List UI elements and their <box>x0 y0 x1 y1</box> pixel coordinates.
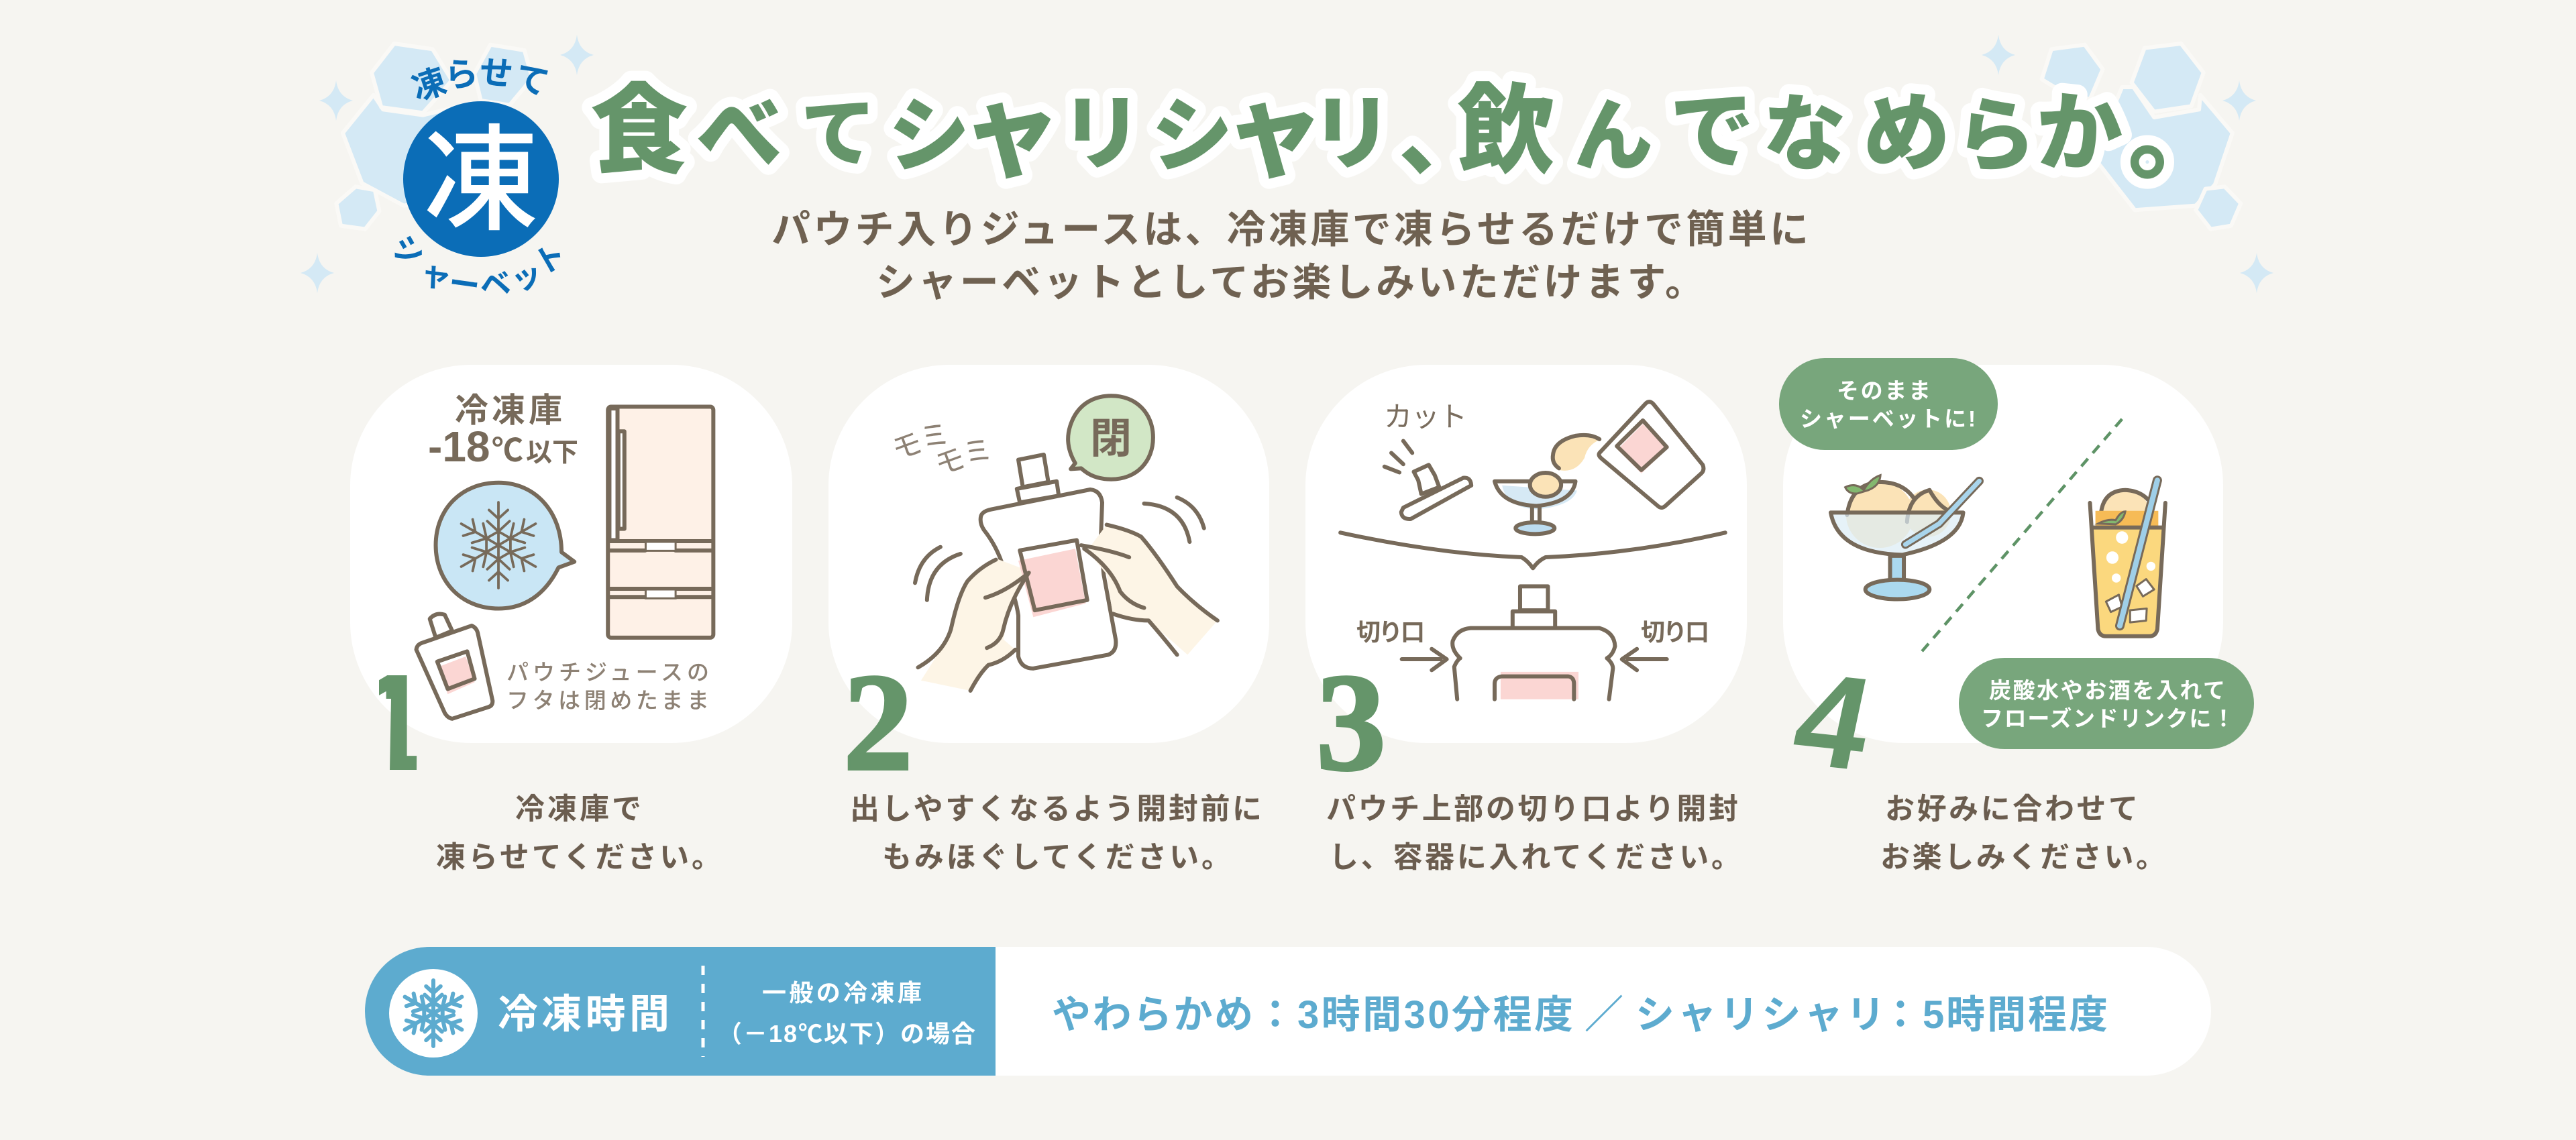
callout: closed bubble: 閉 <box>1090 416 1132 462</box>
badge: frozen sherbet <box>387 53 572 304</box>
value: freezing times: ： <box>1256 993 1295 1037</box>
illustration: pouch <box>417 614 492 719</box>
text: freezer temperature <box>428 392 578 471</box>
panel: step 4 <box>1779 358 2254 874</box>
number 2: 2 <box>843 645 913 799</box>
title: ャ <box>1224 76 1325 189</box>
illustration: kneading pouch <box>915 455 1218 691</box>
ice hexagons left <box>336 44 532 229</box>
text: freezer temperature: ℃ <box>492 433 523 468</box>
panel: step 2 <box>828 365 1269 874</box>
title: か <box>2037 86 2123 182</box>
freezing time band <box>365 947 2211 1076</box>
badge: frozen sherbet: せ <box>478 53 515 94</box>
panel: step 3 <box>1305 365 1747 874</box>
text: keep cap closed: パウチジュースの <box>506 660 709 685</box>
text: momi momi: モミ <box>888 416 955 467</box>
badge: frozen sherbet: 凍 <box>423 117 539 245</box>
title: 飲 <box>1457 76 1555 186</box>
divider dashed line <box>1921 419 2122 652</box>
ice hexagons right <box>2042 44 2241 229</box>
callout: as sherbet: シャーベットに! <box>1800 406 1976 431</box>
step 3 caption: パウチ上部の切り口より開封 <box>1326 793 1738 825</box>
illustration: fridge <box>608 407 713 638</box>
note: standard freezer <box>718 979 975 1047</box>
number 1: 1 <box>351 645 435 799</box>
step 4 caption <box>1880 793 2165 874</box>
step 1 caption <box>436 793 721 874</box>
step 1 caption: 凍らせてください。 <box>436 841 721 874</box>
value: freezing times: ： <box>1881 993 1920 1037</box>
text: cut: カット <box>1384 401 1467 433</box>
title: シ <box>1151 91 1233 182</box>
text: keep cap closed <box>506 660 709 713</box>
text: keep cap closed: フタは閉めたまま <box>506 688 709 713</box>
badge: frozen sherbet: 凍 <box>407 62 451 108</box>
number 4: 4 <box>1782 645 1884 798</box>
text: notch labels: 切り口 <box>1641 618 1709 646</box>
step 2 caption <box>850 793 1262 874</box>
band: white value area <box>993 947 2211 1076</box>
illustration: pouring sherbet <box>1340 402 1725 699</box>
step 3 caption: し、容器に入れてください。 <box>1329 841 1741 874</box>
panel: step 1 <box>350 365 792 874</box>
title: な <box>1763 89 1846 181</box>
text: notch labels: 切り口 <box>1356 618 1425 646</box>
badge: frozen sherbet: ー <box>447 265 482 304</box>
value: freezing times <box>1052 993 2108 1037</box>
divider dashes <box>702 966 704 1057</box>
badge: frozen sherbet: ッ <box>506 255 547 298</box>
badge: frozen sherbet: ト <box>528 236 572 282</box>
text: momi momi: モミ <box>930 431 998 482</box>
heading: freezing time: 冷凍時間 <box>498 992 669 1037</box>
title: ら <box>1955 91 2036 181</box>
note: standard freezer: （－18℃以下）の場合 <box>718 1020 975 1047</box>
title: 、 <box>1399 89 1486 186</box>
callout: as sherbet <box>1779 358 1998 450</box>
value: freezing times: やわらかめ <box>1052 993 1253 1037</box>
value: freezing times: 5時間程度 <box>1923 993 2108 1037</box>
badge: frozen sherbet: ャ <box>416 254 456 297</box>
badge: frozen sherbet: ら <box>442 54 480 95</box>
title: シ <box>888 91 970 182</box>
number 3: 3 <box>1316 645 1386 799</box>
value: freezing times: 3時間30分程度 <box>1297 993 1573 1037</box>
title: で <box>1670 84 1754 179</box>
illustration: snow bubble <box>436 483 574 609</box>
band: blue label area <box>365 947 996 1076</box>
illustration: sherbet glass <box>1831 475 1979 600</box>
step 1 caption: 冷凍庫で <box>515 793 641 825</box>
title: 。 <box>2128 79 2229 192</box>
step 3 caption <box>1326 793 1741 874</box>
badge: frozen sherbet: シ <box>387 228 431 274</box>
callout: frozen drink <box>1959 658 2254 749</box>
value: freezing times: ／ <box>1585 993 1623 1037</box>
text: freezer temperature: 以下 <box>526 439 578 467</box>
callout: frozen drink: 炭酸水やお酒を入れて <box>1989 678 2225 703</box>
icon: snowflake <box>389 969 478 1058</box>
title: べ <box>696 87 782 182</box>
text: momi momi <box>888 416 998 482</box>
title: ん <box>1574 93 1653 181</box>
text: notch labels <box>1356 618 1709 646</box>
step 4 caption: お楽しみください。 <box>1880 841 2165 874</box>
step 2 caption: もみほぐしてください。 <box>882 841 1231 874</box>
badge: frozen sherbet: て <box>511 58 553 103</box>
subtitle: パウチ入りジュースは、冷凍庫で凍らせるだけで簡単に <box>771 208 1809 251</box>
callout: closed bubble <box>1068 396 1153 479</box>
badge: frozen sherbet: ベ <box>478 266 513 303</box>
callout: as sherbet: そのまま <box>1837 378 1931 403</box>
step 2 caption: 出しやすくなるよう開封前に <box>850 793 1262 825</box>
title: リ <box>1061 89 1142 180</box>
subtitle: シャーベットとしてお楽しみいただけます。 <box>876 261 1704 304</box>
title: ャ <box>961 76 1062 189</box>
value: freezing times: シャリシャリ <box>1635 993 1885 1037</box>
subtitle <box>771 208 1809 304</box>
illustration: frozen drink <box>2090 480 2165 636</box>
text: freezer temperature: -18 <box>428 422 490 471</box>
sparkles <box>301 35 2273 293</box>
callout: frozen drink: フローズンドリンクに！ <box>1981 706 2235 731</box>
title: め <box>1863 84 1950 182</box>
text: freezer temperature: 冷凍庫 <box>455 392 562 429</box>
title: リ <box>1311 89 1393 180</box>
title: 食 <box>590 76 688 186</box>
title: て <box>801 92 876 176</box>
note: standard freezer: 一般の冷凍庫 <box>762 979 922 1007</box>
step 4 caption: お好みに合わせて <box>1885 793 2138 825</box>
